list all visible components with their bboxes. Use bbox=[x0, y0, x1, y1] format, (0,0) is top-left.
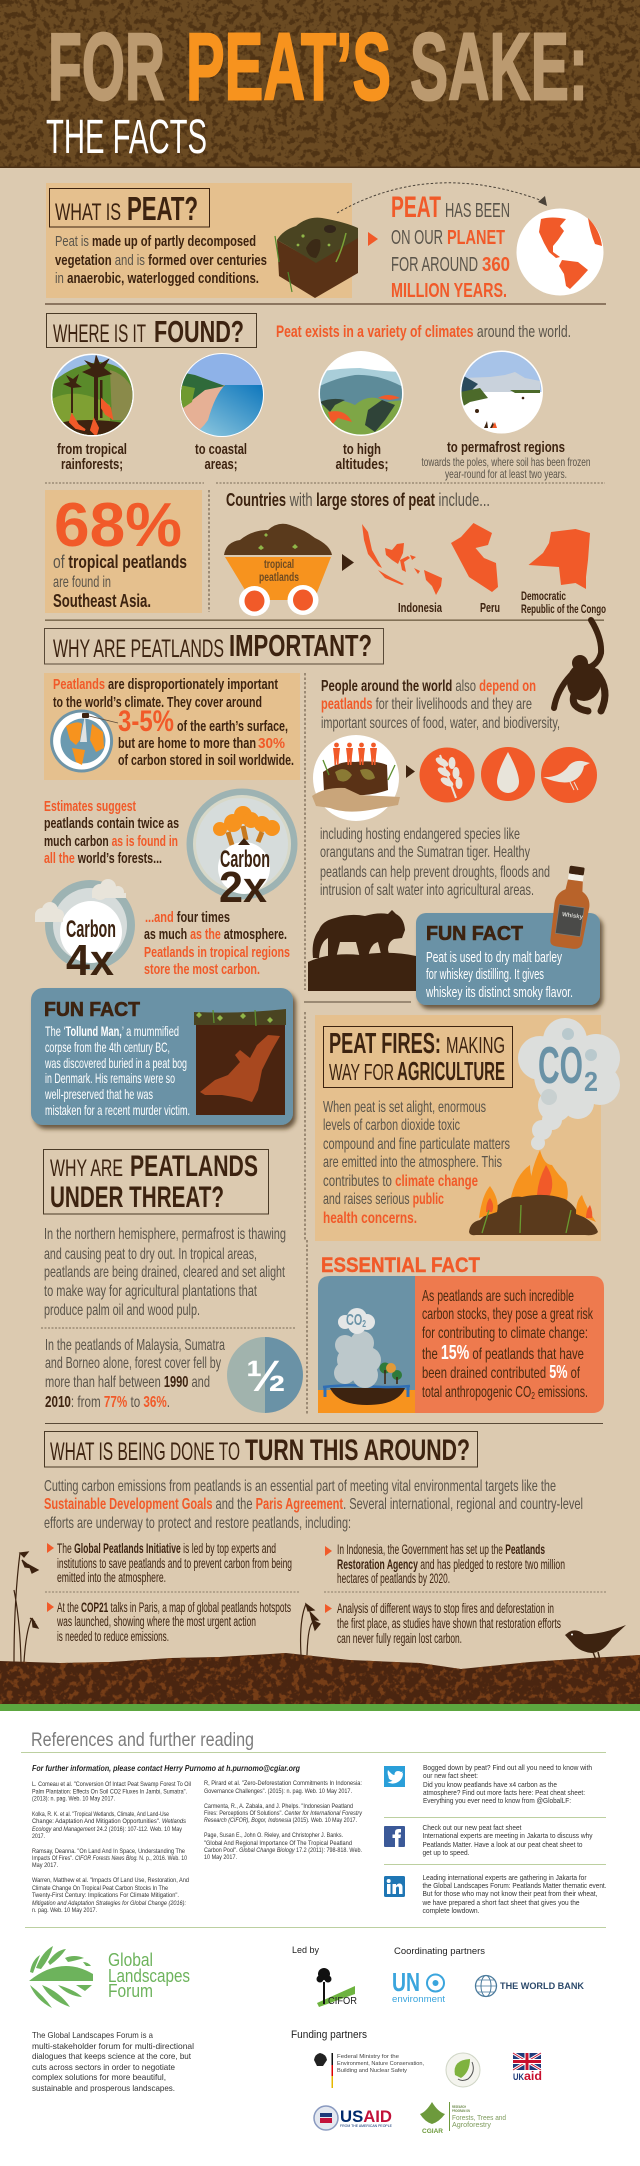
references left column: (2013): n. pag. Web. 10 May 2017. bbox=[32, 1796, 115, 1803]
vertical dotted divider bbox=[305, 673, 307, 1415]
references right column: Carmenta, R., A. Zabala, and J. Phelps. "Indonesian Peatland bbox=[204, 1803, 353, 1810]
text: essential fact: emissions. bbox=[535, 1384, 588, 1401]
logo: German ministry bbox=[314, 2053, 424, 2088]
bullet: analysis: can never fully regain lost carbon. bbox=[337, 1631, 462, 1646]
icon: carbon 2x: Carbon bbox=[220, 846, 270, 873]
heading: essential fact: ESSENTIAL FACT bbox=[321, 1254, 480, 1277]
text: 68 percent caption bbox=[53, 552, 187, 611]
heading: peat fires bbox=[324, 1026, 512, 1088]
bullet: Peatlands Restoration Agency bbox=[325, 1542, 565, 1586]
text: threats: In the northern hemisphere, permafrost is thawing bbox=[44, 1226, 286, 1243]
label: coastal bbox=[195, 441, 247, 473]
text: forest cover: more than half between 1990 and bbox=[45, 1374, 210, 1391]
logo: CIFOR bbox=[316, 1968, 357, 2007]
text: GLF description: sustainable and prosperous landscapes. bbox=[32, 2083, 175, 2093]
text: facebook message: International experts are meeting in Jakarta to discuss why bbox=[422, 1831, 593, 1840]
panel: countries with peat bbox=[224, 490, 606, 616]
icon: tropical rainforest bbox=[50, 350, 135, 440]
text: twitter message: atmosphere? Find out more facts here: Peat cheat sheet: bbox=[423, 1788, 585, 1797]
references left column: n. pag. Web. 10 May 2017. bbox=[32, 1907, 97, 1914]
text: climate importance: of carbon stored in soil worldwide. bbox=[118, 752, 294, 769]
text: Tollund Man: corpse from the 4th century BC, bbox=[45, 1039, 170, 1055]
heading: why important bbox=[44, 628, 384, 664]
divider bbox=[45, 620, 604, 621]
icon: permafrost bbox=[460, 350, 545, 434]
icon: peat cart: tropical bbox=[264, 557, 294, 571]
text: twitter message: Everything you ever need to know from @GlobalLF: bbox=[423, 1796, 571, 1805]
bullet: Peatlands Restoration Agency: hectares of peatlands by 2020. bbox=[337, 1571, 450, 1586]
text: peat age: PEAT bbox=[391, 191, 441, 224]
icon: burning peat mound bbox=[469, 1150, 598, 1235]
text: peat fires: and raises serious public bbox=[323, 1191, 444, 1208]
references left column: Palm Plantation: Effects On Soil CO2 Fluxes In Jambi, Sumatra". bbox=[32, 1788, 187, 1795]
icon: peat cart: peatlands bbox=[259, 570, 299, 584]
bullet: COP21: was launched, showing where the most urgent action bbox=[56, 1614, 256, 1629]
references left column bbox=[32, 1781, 191, 1914]
icon: carbon 4x bbox=[35, 879, 135, 985]
icon: CO2 cloud: CO bbox=[538, 1037, 583, 1095]
label: permafrost: to permafrost regions bbox=[447, 439, 565, 456]
heading: why threat bbox=[44, 1150, 268, 1214]
icon: carbon 2x: 2x bbox=[219, 863, 268, 912]
text: four times atmosphere: Peatlands in tropical regions bbox=[144, 944, 290, 961]
text: peat fires: compound and fine particulate matters bbox=[323, 1136, 510, 1153]
text: four times atmosphere: store the most carbon. bbox=[144, 961, 260, 978]
title: FOR bbox=[48, 14, 165, 120]
text: forest cover bbox=[45, 1337, 225, 1411]
text: people depend on peatlands bbox=[321, 678, 560, 732]
text: people depend on peatlands: peatlands for their livelihoods and they are bbox=[321, 696, 532, 713]
text: four times atmosphere bbox=[144, 909, 290, 978]
heading: countries: Countries with large stores of peat include... bbox=[226, 490, 490, 510]
logo: German ministry: Environment, Nature Conservation, bbox=[337, 2061, 424, 2067]
text: linkedin message: the Global Landscapes Forum: Peatlands Matter thematic event. bbox=[422, 1881, 606, 1890]
text: Tollund Man bbox=[44, 1023, 190, 1118]
stat: 68%: 68% bbox=[54, 491, 182, 560]
map: Indonesia bbox=[362, 524, 442, 595]
logo: USAID: USAID bbox=[340, 2107, 392, 2126]
text: Tollund Man: well-preserved that he was bbox=[44, 1086, 153, 1102]
text: facebook message: Peatlands Matter. Have a look at our peat cheat sheet to bbox=[422, 1840, 582, 1849]
references left column: Impacts Of Fires". CIFOR Forests News Blog. N. p., 2016. Web. 10 bbox=[32, 1855, 187, 1862]
arrow: to countries bbox=[342, 554, 354, 571]
text: twitter message: Bogged down by peat? Find out all you need to know with bbox=[423, 1763, 592, 1772]
text: climate importance: Peatlands are disproportionately important bbox=[53, 676, 278, 693]
icon: orangutan bbox=[554, 620, 605, 711]
heading: turn this around bbox=[44, 1432, 478, 1467]
text: forest cover: and Borneo alone, forest cover fell by bbox=[45, 1355, 221, 1372]
icon: globe bbox=[516, 208, 604, 296]
label: coastal: areas; bbox=[204, 456, 238, 473]
logo: UN environment bbox=[392, 1967, 445, 2005]
text: linkedin message: complete lowdown. bbox=[422, 1906, 480, 1915]
bullet: Global Peatlands Initiative: emitted into the atmosphere. bbox=[57, 1570, 166, 1585]
icon: CO2 cloud: 2 bbox=[584, 1066, 598, 1097]
icon: carbon 4x: 4x bbox=[66, 936, 115, 985]
text: four times atmosphere: as much as the atmosphere. bbox=[144, 926, 287, 943]
logo: CGIAR Forests Trees Agroforestry: Agroforestry bbox=[452, 2122, 492, 2129]
bullet: COP21: At the COP21 talks in Paris, a map of global peatlands hotspots bbox=[57, 1600, 291, 1615]
references left column: 2017. bbox=[32, 1833, 45, 1840]
logo: CIFOR: CIFOR bbox=[328, 1996, 357, 2007]
heading: what is peat: PEAT? bbox=[127, 190, 198, 227]
section: where is it found bbox=[46, 314, 590, 481]
bullet: Global Peatlands Initiative: The Global Peatlands Initiative is led by top experts and bbox=[57, 1541, 276, 1556]
label: funding partners: Funding partners bbox=[291, 2029, 367, 2041]
text: facebook message: Check out our new peat fact sheet bbox=[422, 1823, 522, 1832]
icon: linkedin bbox=[384, 1876, 405, 1897]
icon: biodiversity bird bbox=[541, 747, 597, 803]
text: endangered species bbox=[320, 826, 550, 899]
logo: funding partner seal bbox=[446, 2053, 480, 2087]
text: linkedin message: But for those who may not know their peat from their wheat, bbox=[422, 1889, 598, 1898]
panel: what is peat bbox=[46, 183, 352, 298]
references left column: Ecology and Management 24.2 (2016): 107-112. Web. 10 May bbox=[32, 1826, 183, 1833]
logo: CGIAR Forests Trees Agroforestry bbox=[420, 2102, 506, 2135]
panel: climate importance bbox=[44, 673, 300, 780]
text: Tollund Man: The ‘Tollund Man,’ a mummified bbox=[45, 1023, 179, 1039]
logo: CGIAR Forests Trees Agroforestry: PROGRAM ON bbox=[452, 2109, 470, 2113]
text: essential fact: the 15% of peatlands that have bbox=[422, 1342, 584, 1364]
heading: turn this around: WHAT IS BEING DONE TO bbox=[50, 1438, 240, 1466]
text: endangered species: including hosting endangered species like bbox=[320, 826, 520, 843]
heading: where is it found: WHERE IS IT bbox=[53, 320, 146, 348]
logo: Global Landscapes Forum bbox=[29, 1946, 190, 2008]
text: linkedin message: we have prepared a short fact sheet that gives you the bbox=[422, 1898, 580, 1907]
text: twitter message bbox=[423, 1763, 592, 1805]
heading: references: References and further reading bbox=[31, 1730, 254, 1751]
label: coastal: to coastal bbox=[195, 441, 247, 458]
label: permafrost bbox=[422, 439, 590, 481]
text: estimates suggest: peatlands contain twice as bbox=[44, 815, 179, 832]
page background bbox=[0, 168, 640, 1708]
icon: grass left bbox=[14, 1552, 38, 1662]
text: peat fires: levels of carbon dioxide toxic bbox=[323, 1117, 460, 1134]
panel: essential fact bbox=[318, 1276, 604, 1413]
icon: people on peat in hand bbox=[312, 735, 400, 821]
references left column: Change: Adaptation And Mitigation Opportunities". Wetlands bbox=[32, 1818, 187, 1825]
logo: UK aid bbox=[513, 2053, 542, 2083]
header banner bbox=[0, 0, 640, 168]
logo: UK aid: aid bbox=[524, 2069, 542, 2083]
text: GLF description: The Global Landscapes Forum is a bbox=[32, 2030, 153, 2040]
text: whiskey fact: for whiskey distilling. It gives bbox=[426, 966, 544, 983]
map: Peru bbox=[451, 523, 498, 592]
icon: whisky bottle: Whisky bbox=[562, 912, 584, 921]
heading: peat fires: MAKING bbox=[446, 1032, 505, 1058]
icon: orange arrow bbox=[368, 232, 378, 246]
text: forest cover: In the peatlands of Malaysia, Sumatra bbox=[45, 1337, 225, 1354]
heading: peat fires: PEAT FIRES: bbox=[329, 1028, 441, 1060]
text: climate importance bbox=[53, 676, 294, 769]
arrow: to services bbox=[406, 765, 415, 778]
text: threats: produce palm oil and wood pulp. bbox=[44, 1302, 200, 1319]
heading: what is peat bbox=[50, 188, 210, 227]
heading: peat fires: AGRICULTURE bbox=[397, 1056, 505, 1086]
text: peat age: FOR AROUND bbox=[391, 254, 478, 276]
text: peat age: MILLION YEARS. bbox=[391, 280, 507, 302]
logo: UN environment: UN bbox=[392, 1967, 420, 1997]
label: high altitudes bbox=[336, 441, 388, 473]
heading: why important: IMPORTANT? bbox=[229, 628, 372, 663]
logo: World Bank bbox=[476, 1976, 584, 1996]
logo: CGIAR Forests Trees Agroforestry: RESEARCH bbox=[452, 2105, 466, 2109]
heading: fun fact: FUN FACT bbox=[426, 923, 523, 945]
text: whiskey fact: whiskey its distinct smoky flavor. bbox=[425, 984, 573, 1001]
heading: fun fact: FUN FACT bbox=[44, 999, 140, 1021]
text: climate importance: to the world’s climate. They cover around bbox=[53, 694, 262, 711]
text: peat fires: are emitted into the atmosphere. This bbox=[323, 1154, 502, 1171]
icon: water bbox=[481, 747, 535, 801]
text: twitter message: our new fact sheet: bbox=[423, 1771, 478, 1780]
text: peat age: HAS BEEN bbox=[445, 200, 510, 222]
references right column: R, Pirard et al. "Zero-Deforestation Commitments In Indonesia: bbox=[204, 1780, 362, 1787]
text: facebook message: get up to speed. bbox=[422, 1848, 470, 1857]
text: peat definition: in anaerobic, waterlogged conditions. bbox=[55, 270, 259, 287]
text: peat definition: Peat is made up of partly decomposed bbox=[55, 233, 256, 250]
references left column: Climate Change On Tropical Peat Carbon Stocks In The bbox=[32, 1885, 168, 1892]
text: forest cover: 2010: from 77% to 36%. bbox=[45, 1394, 170, 1411]
bullet: Peatlands Restoration Agency: Restoration Agency and has pledged to restore two million bbox=[337, 1557, 565, 1572]
logo: Global Landscapes Forum: Forum bbox=[108, 1981, 153, 2001]
labels: countries: Peru bbox=[480, 600, 500, 615]
text: peat age bbox=[391, 191, 510, 302]
icon: facebook bbox=[384, 1826, 405, 1847]
text: peat definition: vegetation and is formed over centuries bbox=[55, 252, 267, 269]
text: peat definition bbox=[55, 233, 267, 287]
references left column: Mitigation and Adaptation Strategies for Global Change (2016): bbox=[32, 1900, 186, 1907]
references left column: Ramsay, Deanna. "On Land And In Space, Understanding The bbox=[32, 1848, 185, 1855]
bullet: COP21 bbox=[47, 1600, 291, 1644]
text: Tollund Man: was discovered buried in a peat bog bbox=[44, 1055, 187, 1071]
icon: twitter bbox=[384, 1766, 405, 1787]
text: peat fires: health concerns. bbox=[323, 1210, 417, 1227]
text: 68 percent caption: of tropical peatlands bbox=[53, 552, 187, 572]
text: people depend on peatlands: People around the world also depend on bbox=[321, 678, 536, 695]
text: estimates suggest: all the world’s forests... bbox=[44, 850, 162, 867]
references right column: Carbon Pool". Global Change Biology 17.2 (2011): 798-818. Web. bbox=[204, 1847, 362, 1854]
icon: peat cart bbox=[224, 524, 332, 616]
references left column: L. Comeau et al. "Conversion Of Intact Peat Swamp Forest To Oil bbox=[32, 1781, 191, 1788]
divider bbox=[45, 1423, 603, 1424]
logo: Global Landscapes Forum: Landscapes bbox=[108, 1966, 190, 1986]
panel: 68 percent bbox=[45, 490, 202, 613]
references right column: Fires: Perceptions Of Solutions". Center for International Forestry bbox=[204, 1810, 363, 1817]
text: peat age: PLANET bbox=[447, 227, 505, 249]
icon: one half: ½ bbox=[246, 1352, 286, 1401]
icon: grass middle bbox=[301, 1604, 320, 1655]
heading: what is peat: WHAT IS bbox=[55, 199, 121, 226]
icon: carbon 4x: Carbon bbox=[66, 916, 116, 943]
references left column: Twenty-First Century: Implications For Climate Mitigation". bbox=[32, 1892, 179, 1899]
label: rainforests: rainforests; bbox=[61, 456, 123, 473]
logo: Global Landscapes Forum: Global bbox=[108, 1950, 153, 1970]
panel: whiskey fun fact bbox=[416, 913, 600, 1005]
text: cutting emissions: efforts are underway to protect and restore peatlands, including: bbox=[44, 1515, 351, 1532]
text: climate importance: of the earth’s surface, bbox=[177, 718, 288, 735]
subtitle: THE FACTS bbox=[46, 111, 207, 164]
label: rainforests: from tropical bbox=[57, 441, 127, 458]
text: essential fact: been drained contributed 5% of bbox=[422, 1362, 580, 1382]
title bbox=[48, 14, 588, 120]
heading: where is it found: FOUND? bbox=[154, 314, 244, 349]
icon: CO2 cloud bbox=[518, 1018, 620, 1150]
text: 68 percent caption: Southeast Asia. bbox=[53, 591, 151, 611]
text: peat fires: contributes to climate change bbox=[323, 1173, 478, 1190]
icon: one half bbox=[227, 1337, 303, 1413]
text: whiskey fact: Peat is used to dry malt barley bbox=[426, 949, 562, 966]
text: essential fact bbox=[422, 1288, 594, 1402]
logo: CGIAR Forests Trees Agroforestry: Forests, Trees and bbox=[452, 2115, 506, 2122]
icon: whisky bottle bbox=[549, 864, 595, 950]
text: peat fires bbox=[323, 1099, 510, 1227]
references left column: May 2017. bbox=[32, 1862, 58, 1869]
logo: USAID: FROM THE AMERICAN PEOPLE bbox=[340, 2124, 393, 2128]
text: GLF description bbox=[32, 2030, 194, 2093]
labels: countries: Democratic bbox=[521, 589, 566, 603]
logo: World Bank: THE WORLD BANK bbox=[500, 1981, 584, 1991]
bullet: COP21: is needed to reduce emissions. bbox=[57, 1629, 169, 1644]
text: threats: to make way for agricultural plantations that bbox=[44, 1283, 257, 1300]
text: four times atmosphere: ...and four times bbox=[145, 909, 230, 926]
text: GLF description: multi-stakeholder forum for multi-directional bbox=[32, 2041, 194, 2051]
icon: bog body bbox=[194, 1009, 286, 1115]
bullet: Peatlands Restoration Agency: In Indonesia, the Government has set up the Peatlands bbox=[337, 1542, 545, 1557]
bullet: analysis bbox=[325, 1601, 561, 1646]
icon: coastal bbox=[180, 350, 265, 440]
text: essential fact: 2 bbox=[531, 1391, 535, 1402]
references right column: 10 May 2017. bbox=[204, 1854, 237, 1861]
label: permafrost: year-round for at least two years. bbox=[445, 467, 567, 481]
text: Tollund Man: mistaken for a recent murder victim. bbox=[45, 1102, 190, 1118]
panel: Tollund Man fun fact bbox=[31, 988, 293, 1125]
text: GLF description: complex solutions for more beautiful, bbox=[32, 2072, 166, 2082]
text: peat fires: When peat is set alight, enormous bbox=[323, 1099, 486, 1116]
logo: UN environment: environment bbox=[392, 1994, 445, 2005]
text: endangered species: orangutans and the Sumatran tiger. Healthy bbox=[320, 844, 530, 861]
text: GLF description: cuts across sectors in order to negotiate bbox=[32, 2062, 175, 2072]
references right column: Page, Susan E., John O. Rieley, and Christopher J. Banks. bbox=[204, 1832, 343, 1839]
heading: turn this around: TURN THIS AROUND? bbox=[245, 1434, 470, 1467]
text: estimates suggest: Estimates suggest bbox=[44, 798, 136, 815]
references right column: Governance Challenges". (2015): n. pag. Web. 10 May 2017. bbox=[204, 1788, 352, 1795]
text: peat age: ON OUR bbox=[391, 227, 443, 249]
bullet: Global Peatlands Initiative: institutions to save peatlands and to prevent carbon from being bbox=[57, 1556, 292, 1571]
panel: peat fires bbox=[315, 1015, 620, 1241]
title: PEAT’S bbox=[186, 14, 391, 120]
icon: emissions from drained peat bbox=[318, 1308, 415, 1413]
labels: countries bbox=[398, 589, 606, 616]
bullet: Global Peatlands Initiative bbox=[47, 1541, 292, 1585]
labels: countries: Indonesia bbox=[398, 600, 443, 615]
arrow: dashed curve to globe bbox=[337, 183, 547, 213]
references right column bbox=[204, 1780, 363, 1861]
label: coordinating partners: Coordinating partners bbox=[394, 1946, 485, 1957]
label: high altitudes: to high bbox=[343, 441, 381, 458]
heading: why threat: PEATLANDS bbox=[130, 1150, 258, 1183]
label: rainforests bbox=[57, 441, 127, 473]
icon: carbon 2x bbox=[186, 788, 298, 912]
text: whiskey fact bbox=[425, 949, 573, 1001]
text: twitter message: Did you know peatlands have x4 carbon as the bbox=[423, 1780, 557, 1789]
references right column: Research (CIFOR), Bogor, Indonesia (2015). Web. 10 May 2017. bbox=[204, 1817, 357, 1824]
section: why important bbox=[44, 628, 384, 780]
icon: earth with peat share bbox=[50, 710, 118, 772]
text: GLF description: dialogues that keeps science at the core, but bbox=[32, 2051, 192, 2061]
heading: peat fires: WAY FOR bbox=[329, 1059, 394, 1085]
references left column: Warren, Matthew et al. "Impacts Of Land Use, Restoration, And bbox=[32, 1877, 189, 1884]
text: endangered species: intrusion of salt water into agricultural areas. bbox=[320, 882, 534, 899]
text: facebook message bbox=[422, 1823, 593, 1857]
text: peat age: 360 bbox=[482, 254, 510, 276]
text: threats: and causing peat to dry out. In tropical areas, bbox=[44, 1246, 257, 1263]
icon: peat cube bbox=[275, 218, 358, 298]
logo: German ministry: Federal Ministry for the bbox=[337, 2054, 399, 2060]
heading: why threat: UNDER THREAT? bbox=[50, 1181, 224, 1214]
text: Tollund Man: in Denmark. His remains were so bbox=[45, 1070, 175, 1086]
text: climate importance: 30% bbox=[258, 735, 285, 752]
text: contact: For further information, please contact Herry Purnomo at h.purnomo@cgiar.org bbox=[32, 1764, 300, 1773]
text: threats bbox=[44, 1226, 286, 1319]
text: estimates suggest: much carbon as is found in bbox=[44, 833, 178, 850]
text: 68 percent caption: are found in bbox=[53, 574, 111, 591]
icon: emissions from drained peat: CO bbox=[346, 1312, 370, 1329]
icon: emissions from drained peat: 2 bbox=[362, 1319, 366, 1330]
text: cutting emissions bbox=[44, 1478, 583, 1532]
text: climates intro: Peat exists in a variety of climates around the world. bbox=[276, 322, 571, 341]
map: DR Congo bbox=[528, 529, 590, 589]
icon: high altitudes bbox=[318, 351, 405, 440]
divider bbox=[45, 304, 606, 305]
label: led by: Led by bbox=[292, 1945, 319, 1956]
text: essential fact: total anthropogenic CO bbox=[422, 1384, 587, 1401]
heading: where is it found bbox=[46, 314, 256, 349]
references left column: Kolka, R. K. et al. "Tropical Wetlands, Climate, And Land-Use bbox=[32, 1811, 169, 1818]
text: linkedin message bbox=[422, 1873, 606, 1915]
text: linkedin message: Leading international experts are gathering in Jakarta for bbox=[422, 1873, 587, 1882]
logo: German ministry: Building and Nuclear Safety bbox=[337, 2068, 407, 2074]
logo: UK aid: UK bbox=[513, 2072, 524, 2082]
references right column: "Global And Regional Importance Of The Tropical Peatland bbox=[204, 1840, 352, 1847]
text: climate importance: 3-5% bbox=[118, 705, 174, 738]
label: high altitudes: altitudes; bbox=[336, 456, 388, 473]
green band bbox=[0, 1704, 640, 1711]
heading: why important: WHY ARE PEATLANDS bbox=[53, 635, 224, 663]
logo: USAID bbox=[314, 2106, 393, 2130]
text: threats: peatlands are being drained, cleared and set alight bbox=[44, 1264, 285, 1281]
soil ground bbox=[0, 1650, 640, 1704]
icon: food bbox=[420, 748, 474, 802]
text: climate importance: but are home to more than bbox=[118, 735, 256, 752]
heading: why threat: WHY ARE bbox=[50, 1155, 123, 1182]
text: estimates suggest bbox=[44, 798, 179, 867]
icon: bird bbox=[565, 1625, 626, 1660]
logo: CGIAR Forests Trees Agroforestry: CGIAR bbox=[422, 2129, 444, 2135]
icon: tiger on mound bbox=[308, 910, 416, 991]
